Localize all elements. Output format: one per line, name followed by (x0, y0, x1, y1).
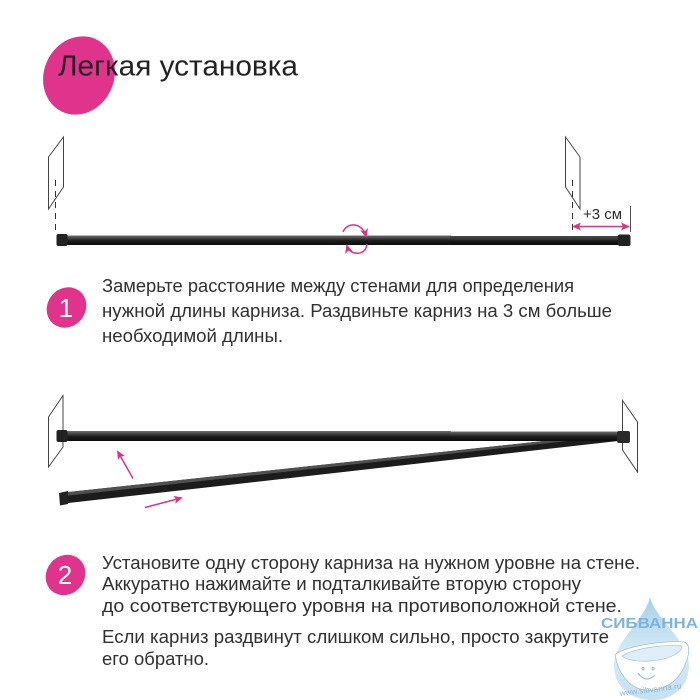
left dashed guide (54, 180, 56, 235)
icon: left wall (48, 137, 64, 209)
step 1 badge: 1 (59, 293, 73, 323)
tilted rod (59, 433, 618, 506)
step 2 badge: 2 (58, 560, 72, 590)
dimension arrow (574, 226, 628, 228)
icon: water drop (614, 597, 689, 700)
logo wordmark: СИБВАННА (601, 616, 699, 632)
icon: right wall (566, 137, 580, 209)
title: Легкая установка (58, 50, 299, 82)
step 1 text (102, 275, 612, 346)
icon: right wall (622, 400, 638, 472)
icon: rotate arrows (343, 225, 367, 253)
diagram: installing the rod (48, 396, 638, 508)
logo url: www.sibvanna.ru (618, 681, 682, 698)
step 1 text: необходимой длины. (102, 325, 283, 346)
dimension label: +3 см (583, 206, 622, 223)
step 2 text: Аккуратно нажимайте и подталкивайте вторую сторону (102, 573, 582, 594)
step 2 text (102, 552, 640, 669)
dimension line (630, 206, 632, 232)
icon: bathtub (615, 642, 689, 690)
step 2 text: Если карниз раздвинут слишком сильно, просто закрутите (102, 626, 609, 647)
step 1 badge (38, 279, 95, 336)
step 2 text: Установите одну сторону карниза на нужном уровне на стене. (102, 552, 640, 573)
bathtub rim (622, 645, 682, 661)
icon: left wall (48, 396, 63, 467)
step 1 text: Замерьте расстояние между стенами для определения (102, 275, 574, 296)
heading blob (30, 24, 128, 127)
horizontal rod (56, 430, 630, 443)
bathtub eyes and smile (638, 667, 655, 679)
arrow: up-left (118, 452, 133, 478)
diagram: measuring the rod between walls (48, 137, 630, 253)
step 2 text: до соответствующего уровня на противоположной стене. (102, 595, 622, 616)
step 1 text: нужной длины карниза. Раздвиньте карниз на 3 см больше (102, 300, 612, 321)
step 2 text: его обратно. (102, 648, 209, 669)
watermark logo (601, 597, 699, 700)
right dashed guide (572, 180, 574, 233)
arrow: right (145, 498, 181, 508)
curtain rod (56, 234, 630, 246)
step 2 badge (37, 547, 94, 603)
